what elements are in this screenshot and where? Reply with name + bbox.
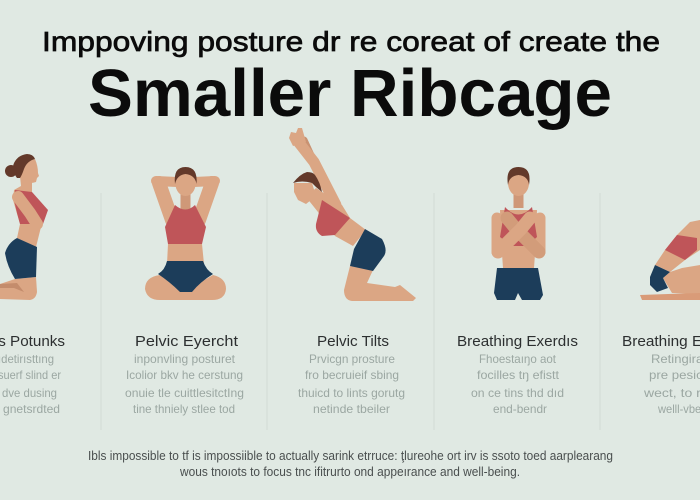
column 1 text: gnetsrdted (3, 402, 60, 416)
footer note: wous tnoıots to focus tnc ifitrurto ond appeırance and well-being. (179, 465, 520, 479)
column 3 text: netinde tbeiler (313, 402, 390, 416)
title: Smaller Ribcage (88, 56, 612, 131)
column 2 text: Icolior bkv he cerstung (126, 368, 243, 382)
column 2 text: onuie tle cuittlesitctIng (125, 386, 244, 400)
column 1 text: dve dusing (2, 386, 57, 400)
footer note (88, 449, 613, 479)
column 4 text: Fhoestaıŋo aot (479, 352, 557, 366)
figure: kneeling arms raised (289, 128, 416, 301)
title: Imppoving posture dr re coreat of create the (42, 26, 660, 57)
column 4 text: focilles tŋ efistt (477, 368, 560, 382)
column 4 text (457, 333, 578, 416)
figure: kneeling side posture (0, 154, 48, 300)
column 3 text: thuicd to lints gorutg (298, 386, 405, 400)
column 3 text: fro becruieif sbing (305, 368, 399, 382)
figure: seated hands behind head (145, 167, 226, 300)
column 3 text: Pelvic Tilts (317, 333, 389, 350)
column 1 text: suerf slind er (0, 368, 61, 382)
column 2 text: Pelvic Eyercht (135, 333, 239, 350)
column 3 text: Prvicgn prosture (309, 352, 395, 366)
figure: folded kneeling stretch (640, 220, 700, 300)
column 4 text: on ce tins thd dıd (471, 386, 564, 400)
column 1 text (0, 333, 65, 416)
column 4 text: end-bendr (493, 402, 547, 416)
footer note: Ibls impossible to tf is impossiible to actually sarink etrruce: ţlureohe ort irv is ssoto toed aarplearang (88, 449, 613, 463)
column 5 text (622, 333, 700, 416)
column 3 text (298, 333, 405, 416)
column 4 text: Breathing Exerdıs (457, 333, 578, 350)
figure: seated hands crossed on chest (494, 167, 543, 300)
column 2 text: tine thniely stlee tod (133, 402, 235, 416)
title (42, 26, 660, 131)
column 2 text (125, 333, 244, 416)
column 2 text: inponvling posturet (134, 352, 236, 366)
